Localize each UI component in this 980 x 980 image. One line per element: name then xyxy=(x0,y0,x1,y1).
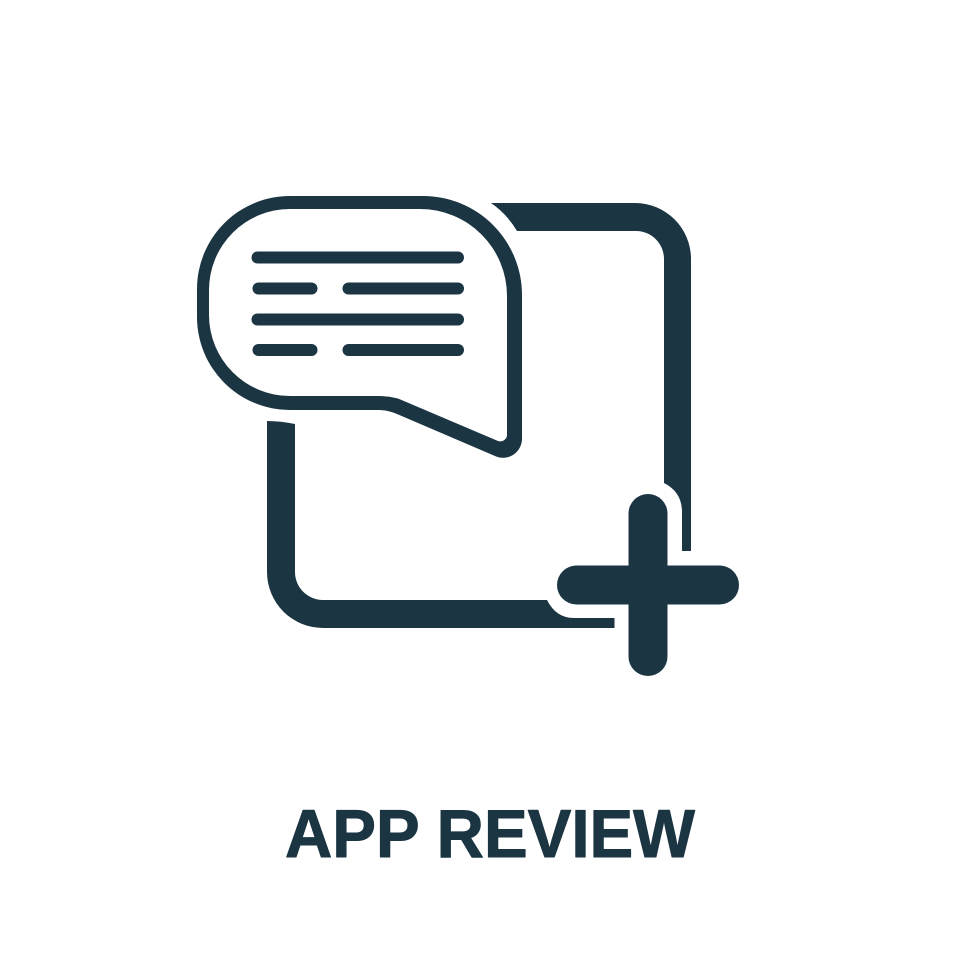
icon: speech bubble xyxy=(197,196,522,458)
icon: app frame upper right xyxy=(491,203,691,551)
icon: app review xyxy=(197,196,739,676)
icon: speech bubble text lines xyxy=(252,252,464,356)
icon: plus sign xyxy=(557,494,739,676)
title: APP REVIEW xyxy=(285,796,696,872)
icon: app frame lower left xyxy=(267,421,614,628)
